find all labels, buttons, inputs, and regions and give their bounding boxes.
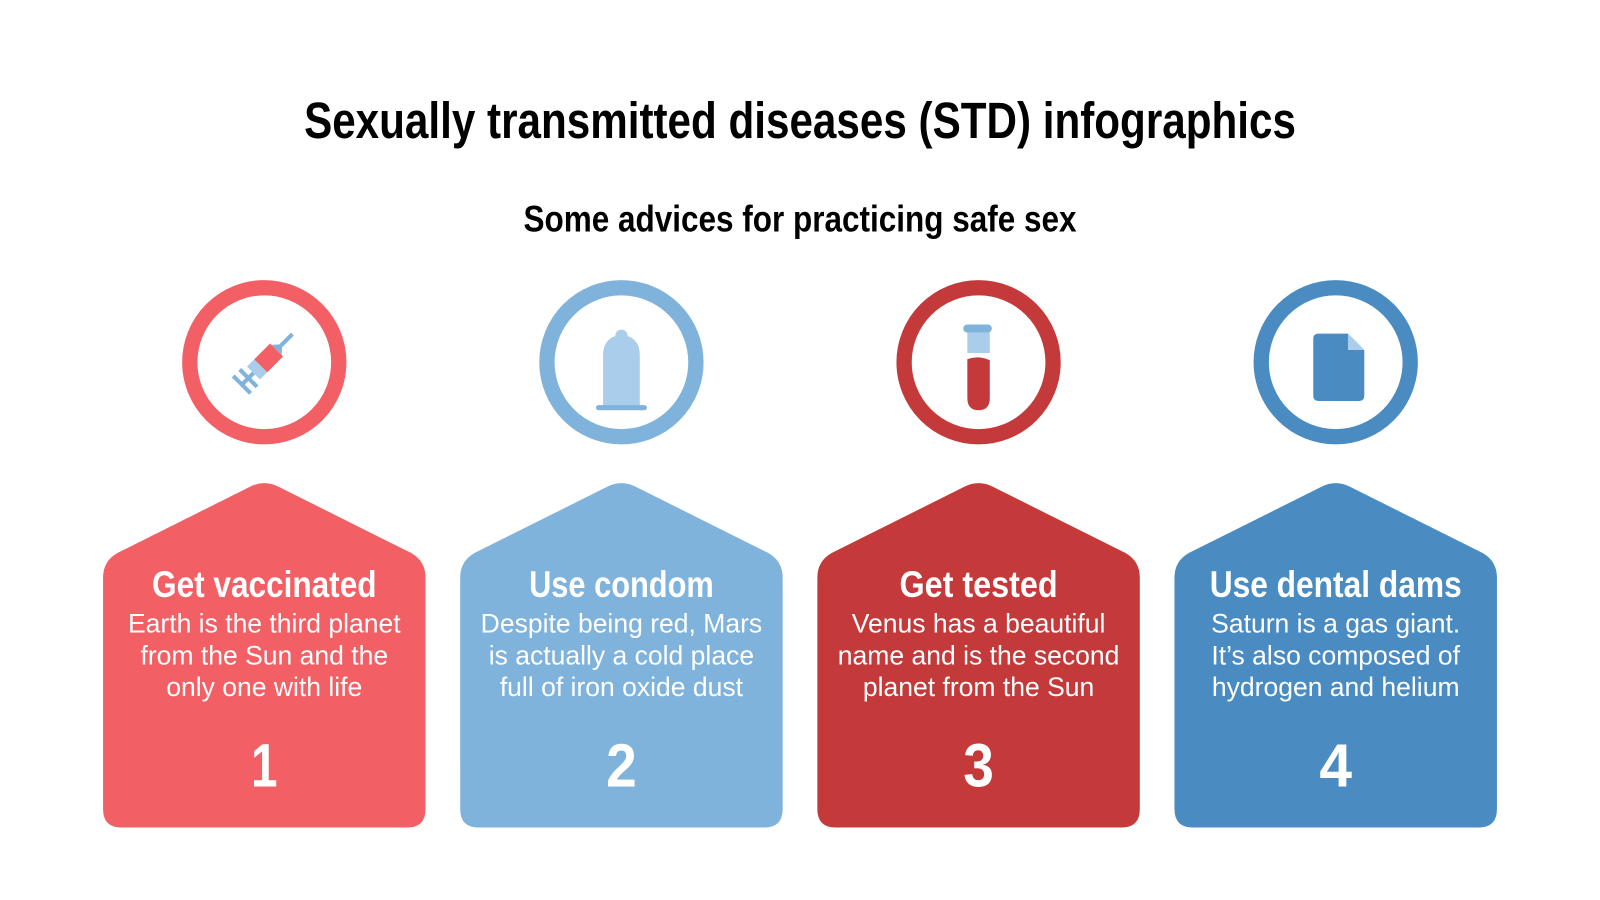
subtitle: Some advices for practicing safe sex <box>523 199 1077 240</box>
card 1: only one with life <box>166 672 362 702</box>
card 1: 1 <box>251 732 278 800</box>
icon: test tube circle <box>904 288 1053 437</box>
card 1 <box>103 483 426 828</box>
card 3: Venus has a beautiful <box>852 609 1105 639</box>
card 2: Despite being red, Mars <box>481 609 762 639</box>
card 4: It’s also composed of <box>1211 640 1461 670</box>
card 1: from the Sun and the <box>140 640 388 670</box>
card 4: Use dental dams <box>1210 564 1462 605</box>
card 3: 3 <box>963 732 994 800</box>
card 2: is actually a cold place <box>489 640 754 670</box>
title: Sexually transmitted diseases (STD) infographics <box>304 92 1296 149</box>
card 2: Use condom <box>529 564 714 605</box>
card 2: full of iron oxide dust <box>500 672 744 702</box>
card 1: Get vaccinated <box>152 564 377 605</box>
card 3: name and is the second <box>838 640 1119 670</box>
card 2 <box>460 483 783 828</box>
icon: syringe circle <box>190 288 339 437</box>
card 4: 4 <box>1319 732 1352 800</box>
card 4: Saturn is a gas giant. <box>1211 609 1460 639</box>
icon: condom circle <box>547 288 696 437</box>
card 3: Get tested <box>899 564 1058 605</box>
card 4 <box>1174 483 1497 828</box>
card 1: Earth is the third planet <box>128 609 401 639</box>
card 3: planet from the Sun <box>863 672 1094 702</box>
icon: dental dam circle <box>1261 288 1410 437</box>
card 2: 2 <box>606 732 637 800</box>
card 3 <box>817 483 1140 828</box>
card 4: hydrogen and helium <box>1212 672 1460 702</box>
